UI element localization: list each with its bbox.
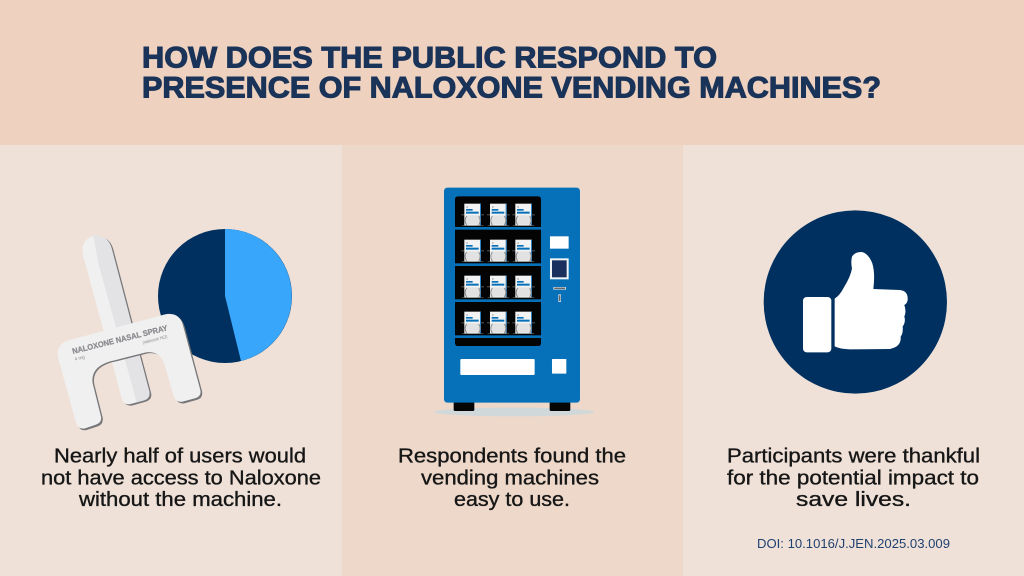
thumb cuff — [803, 297, 831, 352]
title — [142, 42, 881, 104]
caption: middle — [398, 446, 626, 511]
spray label: NALOXONE NASAL SPRAY — [71, 323, 169, 356]
DOI citation: DOI: 10.1016/J.JEN.2025.03.009 — [757, 537, 950, 551]
floor shadow — [434, 408, 594, 416]
machine controls — [550, 236, 569, 302]
caption: left: without the machine. — [78, 489, 282, 511]
spray body — [58, 314, 202, 430]
title: PRESENCE OF NALOXONE VENDING MACHINES? — [142, 72, 881, 104]
icon: vending machine — [434, 188, 594, 416]
product window — [455, 196, 541, 346]
caption: middle: easy to use. — [454, 489, 570, 511]
icon: thumbs up — [764, 210, 947, 394]
spray label: 4 mg — [74, 354, 86, 362]
coin return — [552, 359, 566, 374]
title: HOW DOES THE PUBLIC RESPOND TO — [142, 42, 717, 74]
pickup door — [460, 359, 535, 375]
caption: left — [41, 446, 321, 511]
caption: middle: Respondents found the — [398, 446, 626, 468]
caption: right — [727, 446, 980, 511]
pie chart — [158, 229, 292, 363]
caption: right: save lives. — [796, 489, 911, 511]
machine body — [444, 188, 580, 403]
panel: left background — [0, 145, 342, 576]
machine feet — [454, 400, 570, 411]
panel: right background — [683, 145, 1024, 576]
caption: left: Nearly half of users would — [54, 446, 306, 468]
header band — [0, 0, 1024, 145]
caption: middle: vending machines — [421, 468, 599, 490]
caption: right: Participants were thankful — [727, 446, 980, 468]
spray label: (naloxone HCl) — [142, 334, 168, 345]
icon: naloxone nasal spray — [58, 236, 202, 430]
panel: middle background — [342, 145, 683, 576]
caption: left: not have access to Naloxone — [41, 468, 321, 490]
caption: right: for the potential impact to — [727, 468, 979, 490]
thumb hand — [835, 252, 908, 349]
spray tube — [82, 236, 151, 406]
